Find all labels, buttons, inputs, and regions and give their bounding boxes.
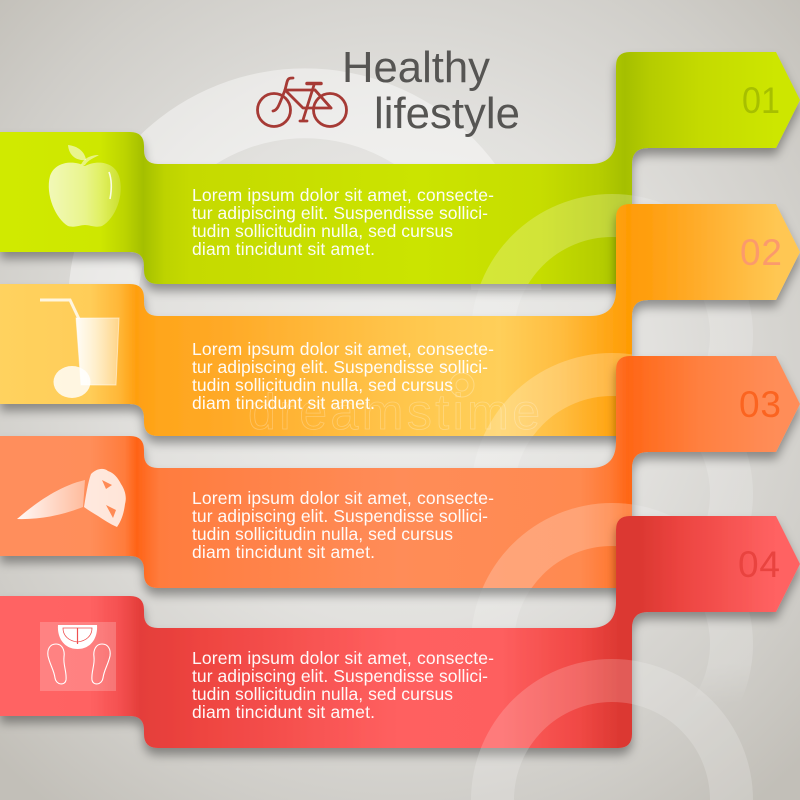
title: [342, 43, 520, 138]
description text 02: tur adipiscing elit. Suspendisse sollici-: [192, 357, 488, 377]
title: Healthy: [342, 43, 490, 92]
ribbon 03: coral: [0, 356, 800, 588]
watermark: dreamstime: [248, 384, 540, 440]
number 03: 03: [739, 384, 781, 425]
title: lifestyle: [374, 89, 520, 138]
description text 03: [192, 488, 494, 562]
icon: juice glass and orange: [40, 300, 119, 398]
number 01: 01: [742, 80, 780, 121]
number 02: 02: [740, 232, 782, 273]
description text 04: [192, 648, 494, 722]
description text 04: tudin sollicitudin nulla, sed cursus: [192, 684, 453, 704]
description text 02: Lorem ipsum dolor sit amet, consecte-: [192, 339, 494, 359]
description text 02: tudin sollicitudin nulla, sed cursus: [192, 375, 453, 395]
description text 03: tur adipiscing elit. Suspendisse sollici-: [192, 506, 488, 526]
description text 01: tudin sollicitudin nulla, sed cursus: [192, 221, 453, 241]
icon: carrot: [17, 469, 126, 527]
ribbon 02: orange: [0, 204, 800, 440]
icon: bathroom scale: [40, 622, 116, 691]
description text 02: diam tincidunt sit amet.: [192, 393, 375, 413]
description text 01: diam tincidunt sit amet.: [192, 239, 375, 259]
description text 03: diam tincidunt sit amet.: [192, 542, 375, 562]
description text 01: Lorem ipsum dolor sit amet, consecte-: [192, 185, 494, 205]
ribbon 04: red: [0, 516, 800, 748]
description text 02: [192, 339, 494, 413]
description text 01: tur adipiscing elit. Suspendisse sollici-: [192, 203, 488, 223]
description text 01: [192, 185, 494, 259]
description text 04: diam tincidunt sit amet.: [192, 702, 375, 722]
description text 04: Lorem ipsum dolor sit amet, consecte-: [192, 648, 494, 668]
description text 03: tudin sollicitudin nulla, sed cursus: [192, 524, 453, 544]
icon: apple: [49, 145, 121, 227]
number 04: 04: [738, 544, 780, 585]
description text 04: tur adipiscing elit. Suspendisse sollici-: [192, 666, 488, 686]
icon: bicycle: [258, 78, 346, 126]
description text 03: Lorem ipsum dolor sit amet, consecte-: [192, 488, 494, 508]
ribbon 01: green: [0, 52, 800, 284]
